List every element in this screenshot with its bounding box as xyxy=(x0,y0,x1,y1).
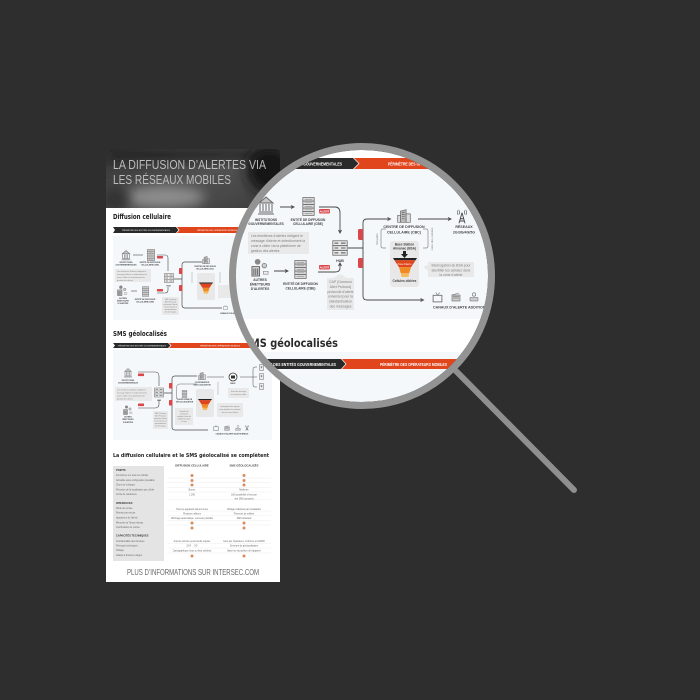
panel: BSA funnel: Base Station xyxy=(395,242,414,246)
diagram: diffusion cellulaire: CELLULAIRE (CBC) xyxy=(196,268,214,270)
diagram: diffusion cellulaire: zone à cibler via la plateforme de xyxy=(117,276,145,279)
note: CAP SMS xyxy=(153,411,168,429)
magnifier lens xyxy=(236,150,488,402)
table values: Serveurs de géolocalisation xyxy=(230,544,259,548)
zoomed band top: PÉRIMÈTRE DES ENTITÉS GOUVERNEMENTALES xyxy=(258,162,342,166)
diagram: SMS géolocalisés: standardisation xyxy=(155,422,166,425)
arrow xyxy=(418,218,451,220)
note: BSA: Interrogation du BSA pour xyxy=(431,264,471,268)
table marks xyxy=(190,474,246,558)
note: émetteurs: gestion des alertes xyxy=(251,249,280,253)
label: institutions: INSTITUTIONS xyxy=(255,218,277,222)
icon: institutions SMS xyxy=(124,368,132,377)
table values: Tous les appareils dans la zone xyxy=(176,508,209,511)
diagram: diffusion cellulaire: ENTITÉ DE DIFFUSION xyxy=(135,298,156,301)
diagram: SMS géolocalisés: envoyée à tous les xyxy=(177,415,191,418)
arrows from hub xyxy=(174,262,222,308)
table row labels: Mode de remise xyxy=(116,507,133,510)
zoomed band top: PÉRIMÈTRE DES OPÉRATEURS MOBILES xyxy=(388,162,456,166)
diagram: diffusion cellulaire: AUTRES xyxy=(119,297,128,300)
note: émetteurs: message d'alerte et sélectionnent la xyxy=(251,239,305,243)
perimeter band: SMS: PÉRIMÈTRE DES ENTITÉS GOUVERNEMENTALES xyxy=(118,344,167,348)
diagram: SMS géolocalisés: téléphones dans xyxy=(178,418,190,420)
diagram: SMS géolocalisés: pour identifier les numéros xyxy=(219,408,241,411)
brackets with labels xyxy=(375,227,434,250)
diagram: SMS géolocalisés: Envoi du message xyxy=(231,391,246,393)
diagram: SMS géolocalisés: localisation xyxy=(180,412,188,416)
diagram: SMS géolocalisés: GOUVERNEMENTALES xyxy=(118,382,139,384)
icon: hub xyxy=(333,241,347,255)
table row labels: CAPACITÉS TECHNIQUES xyxy=(116,532,149,538)
diagram: diffusion cellulaire: CELLULAIRE (CBE) xyxy=(136,300,154,304)
diagram: SMS géolocalisés: protocole d'alerte xyxy=(154,417,167,420)
diagram: SMS géolocalisés: Les émetteurs d'alertes rédigent le xyxy=(117,388,146,392)
zoomed panel: SMS xyxy=(230,352,500,412)
diagram: SMS géolocalisés: universel pour la xyxy=(154,420,167,422)
diagram: diffusion cellulaire: ÉMETTEURS xyxy=(117,300,130,302)
label: institutions xyxy=(248,218,284,225)
table rows lines xyxy=(167,478,271,553)
label: CBE 2: CELLULAIRE (CBE) xyxy=(286,286,315,290)
note: émetteurs xyxy=(115,269,151,282)
icon: CBC xyxy=(398,210,410,222)
icon: tower xyxy=(458,210,466,223)
diagram: diffusion cellulaire: message d'alerte et sélectionnent la xyxy=(117,273,148,276)
icon: hub xyxy=(164,274,174,282)
icon: CBE xyxy=(147,249,155,261)
note: CAP: standardisation xyxy=(329,300,352,304)
title: LA DIFFUSION D’ALERTES VIA xyxy=(113,158,267,172)
label: autres émetteurs: AUTRES xyxy=(253,278,268,282)
label: institutions: GOUVERNEMENTALES xyxy=(248,222,284,226)
diagram: diffusion cellulaire xyxy=(113,236,273,320)
diagram: SMS géolocalisés: GÉOLOCALISATION xyxy=(193,384,211,386)
arrow: CBE 2 to hub xyxy=(318,263,342,272)
icon: phones xyxy=(260,364,263,390)
icon: channels xyxy=(224,305,228,310)
label: CBC: CENTRE DE DIFFUSION xyxy=(383,225,425,229)
magnifier handle xyxy=(455,370,574,490)
table values: Ciblage individuel par localisation xyxy=(227,508,262,511)
table values: Meilleure xyxy=(239,488,249,492)
label: autres émetteurs: D'ALERTES xyxy=(251,287,270,291)
funnel panel SMS xyxy=(196,389,214,417)
icon: CBC xyxy=(202,256,210,264)
diagram: diffusion cellulaire: CANAUX D'ALERTE xyxy=(220,312,239,315)
diagram: diffusion cellulaire: GOUVERNEMENTALES xyxy=(115,264,137,266)
note: émetteurs: zone à cibler via la plateforme de xyxy=(251,244,301,248)
perimeter band: diffusion cellulaire: PÉRIMÈTRE DES ENTITÉS GOUVERNEMENTALES xyxy=(122,229,171,232)
table row labels: INTERFACES xyxy=(116,501,133,505)
table row labels xyxy=(113,466,164,561)
note: BSA xyxy=(423,262,474,277)
diagram: SMS géolocalisés: GÉOLOCALISATION xyxy=(176,400,194,404)
table row labels: Confidentialité des données xyxy=(116,540,145,543)
arrow xyxy=(274,270,288,272)
table values: Aucune donnée personnelle requise xyxy=(174,540,211,543)
brackets with labels: Liste des cellules xyxy=(430,227,434,250)
table row labels: Choix de la langue xyxy=(116,484,136,486)
panel: BSA funnel: Zone d'alerte xyxy=(398,263,412,266)
arrows from hub SMS xyxy=(164,376,208,430)
icon: CBE xyxy=(303,198,314,215)
diagram: SMS géolocalisés: PLATEFORME DE xyxy=(177,398,193,401)
table values: Cartographique (tous ou liste cellules) xyxy=(173,550,212,552)
table values: Bonne xyxy=(189,490,196,492)
table row labels: Adapté à d'autres usages xyxy=(116,554,143,557)
diagram: diffusion cellulaire: protocole d'alerte xyxy=(164,303,177,306)
note: CAP xyxy=(162,297,179,315)
perimeter band: diffusion cellulaire: PÉRIMÈTRE DES OPÉRATEURS MOBILES xyxy=(197,229,238,232)
table values: Affichage automatique, sonnerie possible xyxy=(171,517,214,520)
table values: 2G4 → 5G xyxy=(187,546,198,548)
table values: des SMS groupés) xyxy=(234,498,254,500)
zoomed heading: SMS géolocalisés: SMS géolocalisés xyxy=(243,336,338,350)
label: autres émetteurs xyxy=(250,278,270,290)
diagram: SMS géolocalisés: aux numéros ciblés xyxy=(231,394,246,396)
note: BSA: identifier les cellules dans xyxy=(432,268,471,272)
brackets with labels: Requête xyxy=(375,233,379,245)
diagram: diffusion cellulaire: CELLULAIRE (CBE) xyxy=(141,264,159,266)
label: CBE xyxy=(291,217,326,226)
icon: radio xyxy=(452,293,460,301)
section heading: SMS géolocalisés: SMS géolocalisés xyxy=(113,330,167,338)
column headers: SMS GÉOLOCALISÉS xyxy=(229,462,259,468)
section heading: diffusion cellulaire: Diffusion cellulaire xyxy=(113,213,171,221)
table row labels: Limite de caractères xyxy=(116,493,138,496)
diagram: SMS géolocalisés: gestion des alertes xyxy=(117,398,133,400)
note: CAP: des messages xyxy=(330,304,352,308)
diagram: SMS géolocalisés: Requête de xyxy=(180,410,188,413)
diagram: diffusion cellulaire: HUB xyxy=(166,286,171,288)
table row labels: Confirmation de remise xyxy=(116,526,140,529)
diagram: diffusion cellulaire: des messages xyxy=(165,312,176,314)
note: requête xyxy=(175,408,193,425)
table values: Plusieurs de milliers xyxy=(234,512,255,516)
diagram: SMS géolocalisés: des messages xyxy=(155,426,166,428)
section heading: comparison: La diffusion cellulaire et le SMS géolocalisé se complètent xyxy=(113,452,269,459)
icon: CBE 2 xyxy=(295,261,306,278)
diagram: SMS géolocalisés: AUTRES xyxy=(124,416,132,418)
pills on hub lines xyxy=(358,229,363,268)
note: émetteurs: Les émetteurs d'alertes rédigent le xyxy=(251,234,303,238)
table values xyxy=(171,488,265,552)
diagram: diffusion cellulaire: ENTITÉ DE DIFFUSION xyxy=(140,261,161,264)
icon: autres émetteurs xyxy=(252,259,268,276)
label: CBC: CELLULAIRE (CBC) xyxy=(387,230,422,234)
label: CBE 2 xyxy=(283,281,319,290)
icon: hub SMS xyxy=(154,388,164,397)
diagram: SMS géolocalisés: CAP (Common xyxy=(155,412,166,415)
label: réseaux: RÉSEAUX xyxy=(455,224,473,229)
note: CAP xyxy=(327,274,354,310)
table values: Géré par l'opérateur, conforme au RGPD xyxy=(223,540,265,543)
panel: BSA funnel xyxy=(390,241,419,287)
table values: SMS standard xyxy=(237,517,252,520)
icon: coordinateur xyxy=(198,372,206,380)
perimeter band: SMS xyxy=(113,343,273,348)
note: BSA xyxy=(218,285,248,298)
diagram: diffusion cellulaire: gestion des alertes xyxy=(117,279,133,282)
table values: 1.390 xyxy=(189,494,196,496)
diagram: diffusion cellulaire: standardisation xyxy=(164,308,177,311)
note: émetteurs xyxy=(248,232,309,254)
footer link: PLUS D’INFORMATIONS SUR INTERSEC.COM xyxy=(127,567,259,577)
column headers xyxy=(175,462,259,468)
diagram: SMS géolocalisés: HUB xyxy=(157,400,162,402)
diagram: SMS géolocalisés: CANAUX D'ALERTE ADDITIONNELS xyxy=(216,432,249,436)
header banner: LES RÉSEAUX MOBILES xyxy=(113,172,231,187)
diagram: SMS géolocalisés: Interrogation du registre xyxy=(220,405,240,408)
note: CAP: CAP (Common xyxy=(329,280,352,284)
diagram: diffusion cellulaire: Alert Protocol) xyxy=(165,300,177,304)
diagram: SMS géolocalisés: message d'alerte et sélectionnent la xyxy=(117,392,148,394)
diagram: diffusion cellulaire: INSTITUTIONS xyxy=(119,262,133,264)
panel: BSA funnel: Almanac (BSA) xyxy=(393,246,416,250)
icon: plateforme de géolocalisation xyxy=(182,390,187,398)
icon: down arrow xyxy=(401,251,408,258)
label: CBC xyxy=(383,225,425,234)
table row labels: Apparence de l'alerte xyxy=(116,516,138,520)
pill: CAP: ALERT xyxy=(320,210,330,214)
icon: people xyxy=(470,293,478,301)
funnel panel xyxy=(197,273,215,300)
label: autres émetteurs: ÉMETTEURS xyxy=(250,282,271,286)
diagram: SMS géolocalisés: INSTITUTIONS xyxy=(122,380,135,382)
arrows to phones xyxy=(240,367,257,387)
icon: TV xyxy=(433,293,442,302)
diagram: SMS géolocalisés: dans la zone d'alerte xyxy=(222,411,238,414)
icon: SMSC xyxy=(229,373,237,381)
comparison table xyxy=(113,462,271,561)
diagram: SMS géolocalisés: la zone xyxy=(181,421,187,423)
diagram: SMS géolocalisés: Alert Protocol) xyxy=(155,414,166,418)
label: CBE 2: ENTITÉ DE DIFFUSION xyxy=(283,281,319,286)
table row labels: Activable sans configuration préalable xyxy=(116,479,155,482)
table row labels: Mémoire du Temps réseau xyxy=(116,522,144,524)
note: CAP: Alert Protocol) xyxy=(330,285,351,289)
note: CAP: universel pour la xyxy=(328,294,353,298)
column headers: DIFFUSION CELLULAIRE xyxy=(175,464,209,468)
funnel chart xyxy=(393,258,417,277)
icon: institutions xyxy=(122,251,130,260)
arrow: CBE to hub xyxy=(319,207,342,233)
header banner xyxy=(106,149,280,208)
diagram: diffusion cellulaire: Les émetteurs d'alertes rédigent le xyxy=(117,270,146,273)
infographic page xyxy=(106,149,280,582)
table row labels: Remise par minute xyxy=(116,512,136,514)
table values: Basé sur la position de l'appareil xyxy=(228,550,261,552)
label: CBE: CELLULAIRE (CBE) xyxy=(293,222,323,226)
note: émetteurs SMS xyxy=(115,387,152,401)
note: SMSC xyxy=(228,388,249,398)
diagram: SMS géolocalisés: ÉMETTEURS xyxy=(122,418,134,421)
table values: Plusieurs millions xyxy=(183,512,202,516)
diagram: SMS géolocalisés: D'ALERTES xyxy=(123,421,134,424)
table row labels: Précision de la localisation par cellule xyxy=(116,488,155,492)
label: réseaux: 2G/3G/4G/5G xyxy=(453,230,475,234)
diagram: diffusion cellulaire: CAP (Common xyxy=(164,298,177,301)
zoomed band bottom: PÉRIMÈTRE DES OPÉRATEURS MOBILES xyxy=(380,362,447,367)
diagram: SMS géolocalisés: SMSC xyxy=(230,383,236,385)
table row labels: Ciblage xyxy=(116,550,125,552)
diagram: diffusion cellulaire: D'ALERTES xyxy=(118,302,129,305)
pill: CAP 2: ALERT xyxy=(320,266,330,270)
note: right SMS xyxy=(217,403,243,417)
zoomed band bottom xyxy=(230,359,500,369)
magnifier ring xyxy=(232,146,492,406)
panel: BSA funnel: Cellules ciblées xyxy=(393,279,417,283)
diagram: SMS géolocalisés: zone à cibler via la plateforme de xyxy=(117,394,145,398)
icon: autres émetteurs xyxy=(118,286,127,295)
icon: autres SMS xyxy=(124,406,132,414)
table row labels: Prérequis techniques xyxy=(116,544,138,548)
note: CAP: protocole d'alerte xyxy=(328,290,354,294)
perimeter band: SMS: PÉRIMÈTRE DES OPÉRATEURS MOBILES xyxy=(200,344,241,348)
panel: zoomed diffusion diagram xyxy=(230,158,500,319)
table values: 160 (possibilité d'envoyer xyxy=(231,494,257,496)
zoomed band top xyxy=(296,158,428,169)
table row labels: POINTS xyxy=(116,468,126,472)
icon: channels SMS xyxy=(214,425,249,431)
arrow xyxy=(280,206,294,208)
label: hub: HUB xyxy=(336,259,344,263)
label: réseaux xyxy=(453,224,475,234)
diagram: diffusion cellulaire: universel pour la xyxy=(164,306,177,308)
diagram: SMS géolocalisés xyxy=(113,350,272,440)
arrows from hub xyxy=(348,218,424,302)
table row labels: Fonctionne sur tous les mobiles xyxy=(116,474,149,477)
perimeter band: diffusion cellulaire xyxy=(113,227,273,233)
label: channels: CANAUX D'ALERTE ADDITIONNELS xyxy=(433,306,496,310)
note: BSA: la zone d'alerte xyxy=(440,273,463,277)
diagram: diffusion cellulaire: CENTRE DE DIFFUSION xyxy=(194,266,216,268)
icon: institutions xyxy=(258,197,274,214)
zoomed band bottom: PÉRIMÈTRE DES ENTITÉS GOUVERNEMENTALES xyxy=(252,362,336,367)
label: CBE: ENTITÉ DE DIFFUSION xyxy=(291,217,326,222)
diagram: SMS géolocalisés: COORDINATEUR xyxy=(195,381,210,384)
